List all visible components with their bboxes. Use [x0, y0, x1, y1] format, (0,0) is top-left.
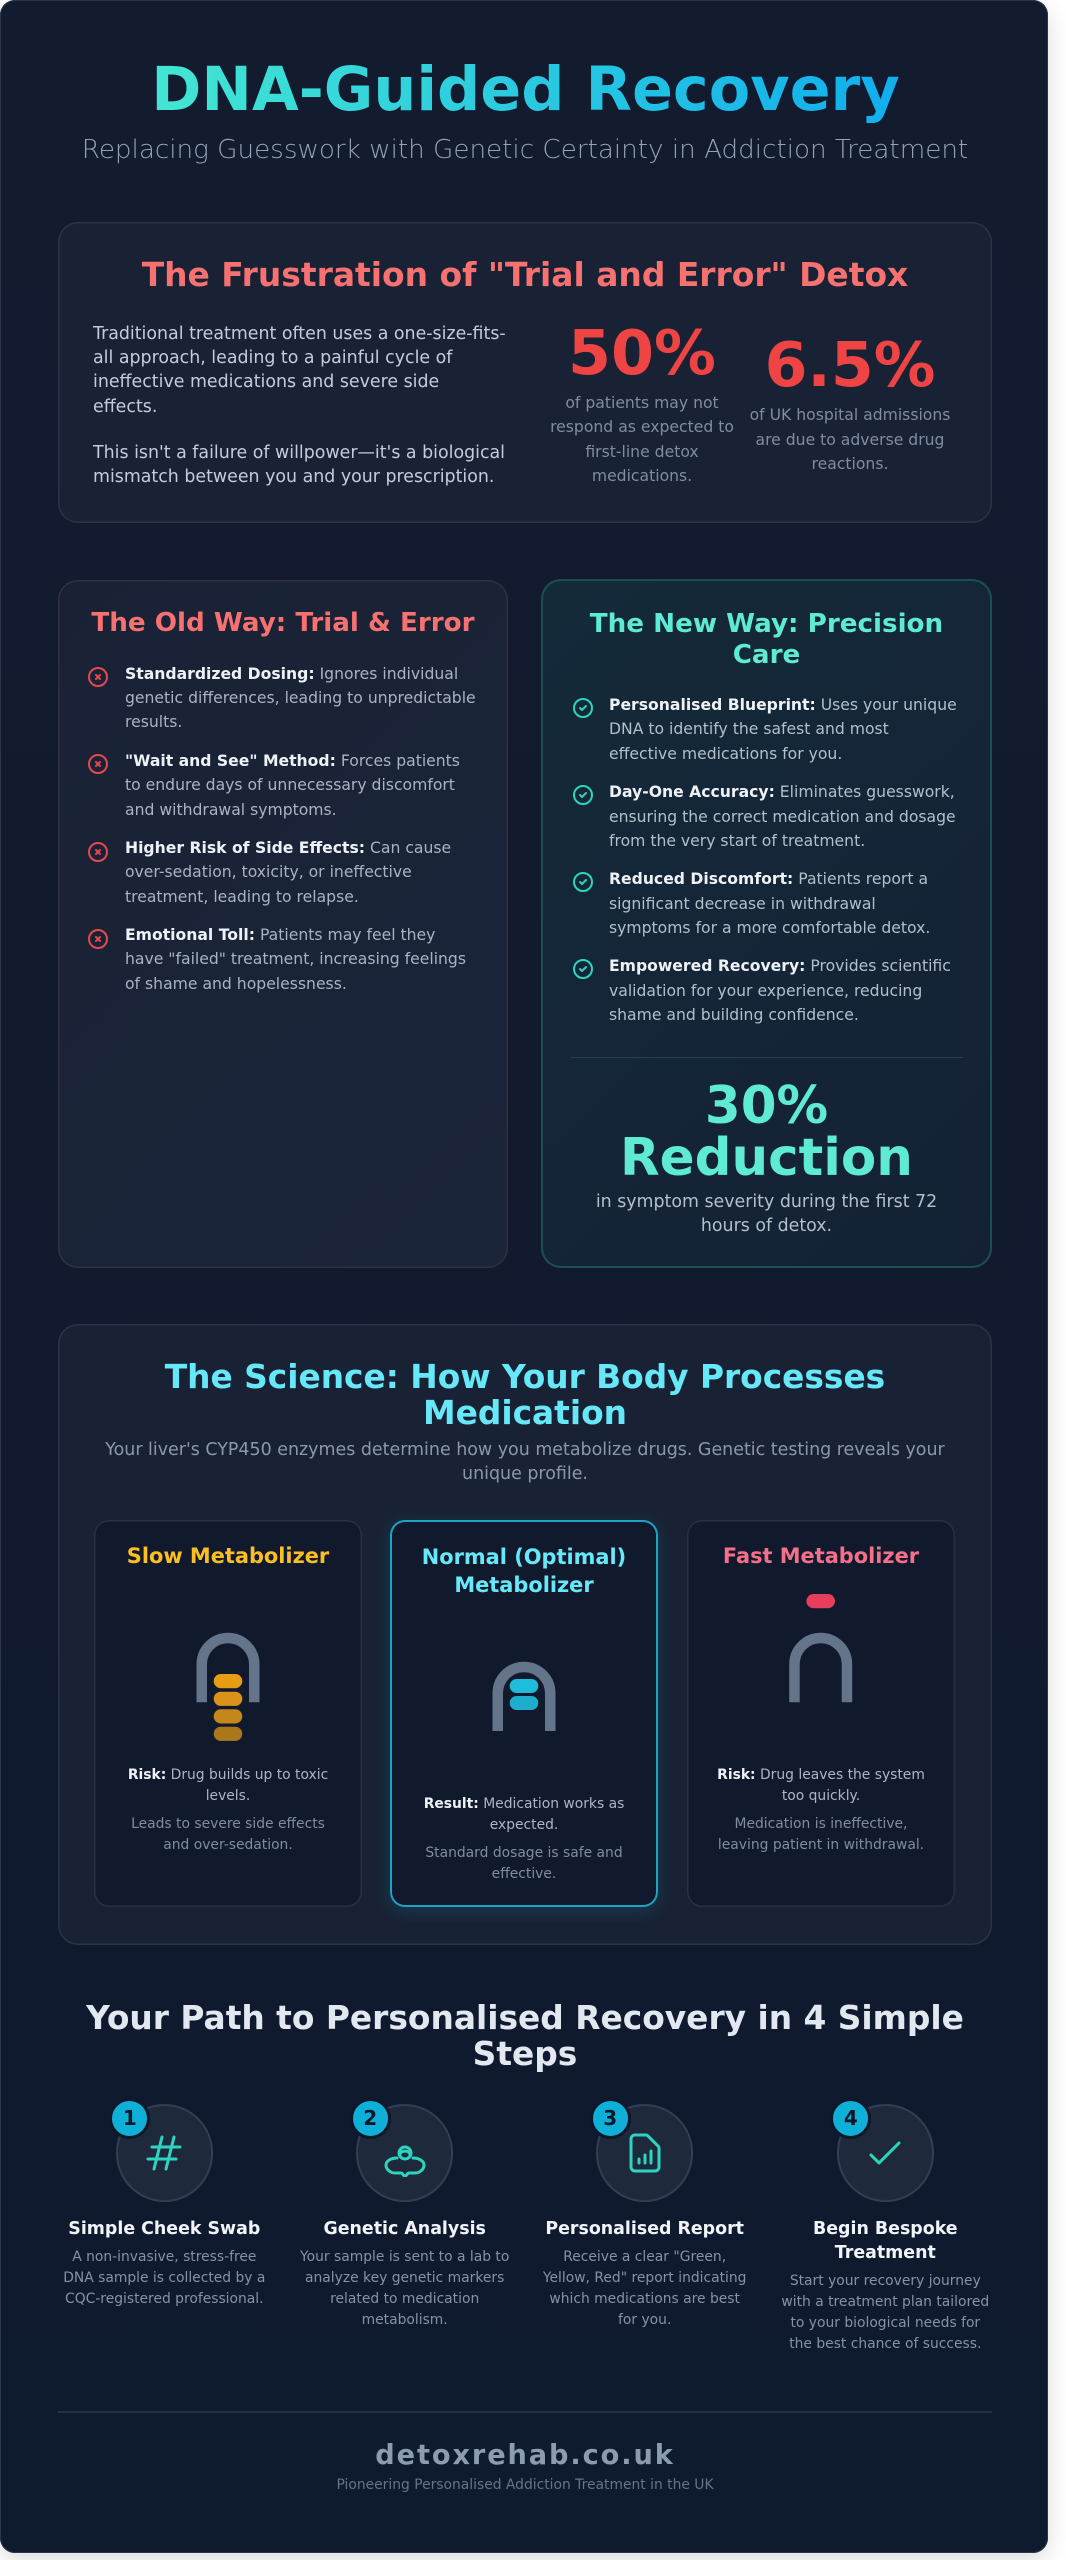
- list item: emotional toll: of shame and hopelessness.: [125, 974, 347, 993]
- icon: x circle 4: [88, 929, 108, 949]
- list item: empowered recovery: shame and building confidence.: [609, 1005, 859, 1024]
- heading: science: The Science: How Your Body Processes: [165, 1358, 885, 1396]
- step description: swab: CQC-registered professional.: [65, 2290, 264, 2306]
- card risk text: fast: [717, 1767, 925, 1804]
- list item: side effects: over-sedation, toxicity, or ineffective: [125, 862, 412, 881]
- badge: 3: 3: [603, 2106, 617, 2130]
- card risk text: slow: Risk: Drug builds up to toxic: [128, 1767, 328, 1783]
- badge: 3: [590, 2098, 631, 2138]
- stat: 50 percent: 50%: [568, 316, 716, 388]
- heading: path to recovery: [86, 1998, 964, 2072]
- list item: accuracy: [609, 782, 956, 850]
- text block: biological mismatch: This isn't a failure of willpower—it's a biological: [93, 442, 505, 462]
- icon: check circle 2: [573, 785, 593, 805]
- badge: 4: [830, 2098, 871, 2138]
- panel: the new way: [541, 579, 992, 1268]
- icon: fast metabolizer diagram: [789, 1594, 852, 1702]
- card note: fast: [718, 1816, 924, 1853]
- card note: slow: and over-sedation.: [163, 1837, 293, 1853]
- panel: the science: [58, 1324, 992, 1945]
- stat: 30 percent reduction: 30%: [705, 1076, 828, 1136]
- step description: report: Yellow, Red" report indicating: [543, 2270, 746, 2286]
- badge: 2: [350, 2098, 391, 2138]
- list item: wait and see: [125, 751, 460, 819]
- step description: treatment: Start your recovery journey: [790, 2273, 981, 2289]
- step 1: [63, 2101, 265, 2306]
- stat: 6.5 percent: 6.5%: [765, 328, 935, 400]
- step title: treatment: Treatment: [835, 2243, 936, 2263]
- list item: side effects: [125, 838, 451, 906]
- heading: new way: Care: [733, 640, 800, 670]
- heading: new way: The New Way: Precision: [590, 609, 943, 639]
- step description: analysis: related to medication: [330, 2290, 479, 2306]
- card title: slow: Slow Metabolizer: [127, 1544, 329, 1568]
- step description: swab: DNA sample is collected by a: [63, 2270, 265, 2286]
- text block: intro: all approach, leading to a painful cycle of: [93, 348, 452, 368]
- step description: report: which medications are best: [549, 2290, 740, 2306]
- footer brand: detoxrehab.co.uk: [375, 2440, 675, 2471]
- card result text: normal: [424, 1796, 624, 1833]
- icon: normal metabolizer diagram: [492, 1662, 556, 1731]
- list item: side effects: Higher Risk of Side Effects: Can cause: [125, 838, 451, 857]
- step description: swab: A non-invasive, stress-free: [72, 2248, 256, 2264]
- card note: normal: [425, 1845, 623, 1882]
- heading: old way: The Old Way: Trial & Error: [91, 608, 475, 638]
- list item: accuracy: Day-One Accuracy: Eliminates guesswork,: [609, 782, 955, 801]
- text block: biological mismatch: [92, 442, 505, 487]
- step title: treatment: Begin Bespoke: [813, 2218, 958, 2238]
- icon: x circle 1: [88, 667, 108, 687]
- text block: science intro: Your liver's CYP450 enzymes determine how you metabolize drugs. Genetic testing reveals your: [105, 1440, 945, 1460]
- text block: biological mismatch: mismatch between you and your prescription.: [93, 467, 494, 487]
- card risk text: fast: too quickly.: [782, 1788, 860, 1804]
- card: fast metabolizer: [687, 1520, 955, 1907]
- step 4: [765, 2100, 1005, 2360]
- step description: report: Receive a clear "Green,: [563, 2248, 726, 2264]
- text block: science intro: unique profile.: [462, 1464, 588, 1484]
- step description: treatment: with a treatment plan tailored: [781, 2294, 989, 2310]
- stat label: 50 percent: of patients may not: [565, 392, 719, 412]
- list item: empowered recovery: validation for your experience, reducing: [609, 981, 922, 1000]
- card note: slow: [131, 1816, 325, 1853]
- heading: path to recovery: Steps: [473, 2034, 577, 2072]
- stat label: symptom severity: [596, 1192, 937, 1236]
- card risk text: slow: [128, 1767, 328, 1804]
- text block: intro: ineffective medications and severe side: [93, 372, 439, 392]
- text block: intro: Traditional treatment often uses a one-size-fits-: [93, 324, 506, 344]
- card title: fast: Fast Metabolizer: [723, 1544, 919, 1568]
- list item: blueprint: Personalised Blueprint: Uses your unique: [609, 695, 957, 714]
- icon: report document: [621, 2129, 669, 2177]
- list item: emotional toll: have "failed" treatment, increasing feelings: [125, 949, 466, 968]
- list item: reduced discomfort: significant decrease in withdrawal: [609, 894, 876, 913]
- list item: blueprint: effective medications for you.: [609, 744, 842, 763]
- title: DNA-Guided Recovery: [151, 54, 900, 124]
- step title: report: Personalised Report: [545, 2218, 744, 2238]
- panel: the old way: [58, 580, 508, 1268]
- heading: frustration: The Frustration of "Trial and Error" Detox: [142, 254, 908, 294]
- list item: emotional toll: Emotional Toll: Patients may feel they: [125, 925, 435, 944]
- icon: check circle 1: [573, 698, 593, 718]
- card title: normal: Normal (Optimal): [422, 1544, 626, 1568]
- stat label: 6.5 percent: are due to adverse drug: [756, 430, 944, 448]
- stat label: 6.5 percent: [750, 405, 950, 473]
- step description: report: for you.: [618, 2312, 671, 2328]
- step description: analysis: analyze key genetic markers: [305, 2270, 504, 2286]
- stat: 30 percent reduction: Reduction: [620, 1128, 913, 1188]
- card note: normal: effective.: [492, 1866, 556, 1882]
- step description: analysis: [285, 2246, 525, 2330]
- step description: analysis: metabolism.: [362, 2312, 448, 2328]
- list item: reduced discomfort: [609, 869, 930, 937]
- heading: science: Medication: [423, 1394, 627, 1432]
- step description: treatment: to your biological needs for: [790, 2315, 980, 2331]
- heading: path to recovery: Your Path to Personalised Recovery in 4 Simple: [86, 1998, 964, 2036]
- badge: 1: 1: [123, 2106, 137, 2130]
- step 2: [300, 2101, 509, 2328]
- text block: intro: effects.: [93, 397, 157, 417]
- stat label: 50 percent: medications.: [592, 466, 692, 485]
- step 3: [525, 2100, 765, 2360]
- icon: check mark: [861, 2129, 909, 2177]
- stat label: 50 percent: [550, 392, 734, 485]
- list item: wait and see: and withdrawal symptoms.: [125, 800, 337, 819]
- list item: side effects: treatment, leading to relapse.: [125, 887, 359, 906]
- stat label: 50 percent: respond as expected to: [550, 417, 734, 436]
- icon: check circle 3: [573, 872, 593, 892]
- step description: treatment: [765, 2271, 1005, 2355]
- icon: hashtag: [146, 2136, 182, 2170]
- badge: 4: 4: [844, 2106, 858, 2130]
- stat label: symptom severity: in symptom severity during the first 72: [596, 1192, 937, 1212]
- list item: empowered recovery: [609, 956, 951, 1024]
- list item: accuracy: ensuring the correct medication and dosage: [609, 807, 956, 826]
- list item: empowered recovery: Empowered Recovery: Provides scientific: [609, 956, 951, 975]
- stat label: 50 percent: first-line detox: [585, 442, 699, 460]
- card risk text: slow: levels.: [206, 1788, 250, 1804]
- heading: science: [164, 1358, 885, 1432]
- list item: standardized dosing: [125, 664, 476, 731]
- card title: normal: [422, 1544, 626, 1596]
- step description: treatment: the best chance of success.: [789, 2336, 981, 2352]
- list item: blueprint: DNA to identify the safest and most: [609, 719, 889, 738]
- card result text: normal: Result: Medication works as: [424, 1796, 624, 1812]
- card risk text: fast: Risk: Drug leaves the system: [717, 1767, 925, 1783]
- list item: reduced discomfort: symptoms for a more comfortable detox.: [609, 918, 930, 937]
- card: slow metabolizer: [94, 1520, 362, 1907]
- icon: x circle 2: [88, 754, 108, 774]
- step description: swab: [63, 2248, 265, 2306]
- icon: check circle 4: [573, 959, 593, 979]
- list item: standardized dosing: results.: [125, 712, 182, 731]
- footer tagline: Pioneering Personalised Addiction Treatment in the UK: [336, 2477, 714, 2493]
- step description: analysis: Your sample is sent to a lab to: [300, 2248, 509, 2264]
- icon: x circle 3: [88, 842, 108, 862]
- step description: report: [525, 2246, 765, 2330]
- list item: accuracy: from the very start of treatment.: [609, 831, 865, 850]
- badge: 1: [109, 2098, 150, 2138]
- stat: 30 percent reduction: [620, 1076, 913, 1188]
- card title: normal: Metabolizer: [454, 1572, 594, 1596]
- list item: wait and see: to endure days of unnecessary discomfort: [125, 775, 455, 794]
- step title: analysis: Genetic Analysis: [323, 2218, 486, 2238]
- stat label: symptom severity: hours of detox.: [701, 1216, 832, 1236]
- card result text: normal: expected.: [490, 1817, 558, 1833]
- text block: intro: [92, 324, 506, 417]
- list item: reduced discomfort: Reduced Discomfort: Patients report a: [609, 869, 928, 888]
- card note: normal: Standard dosage is safe and: [425, 1845, 623, 1861]
- list item: wait and see: "Wait and See" Method: Forces patients: [125, 751, 460, 770]
- subtitle: Replacing Guesswork with Genetic Certainty in Addiction Treatment: [82, 135, 968, 165]
- stat label: 6.5 percent: reactions.: [812, 454, 888, 473]
- icon: slow metabolizer diagram: [196, 1632, 260, 1741]
- text block: science intro: [105, 1440, 945, 1484]
- step title: swab: Simple Cheek Swab: [68, 2218, 260, 2238]
- card note: fast: leaving patient in withdrawal.: [718, 1837, 924, 1853]
- list item: emotional toll: [125, 925, 466, 993]
- icon: genetic analysis: [381, 2129, 429, 2177]
- list item: standardized dosing: genetic differences, leading to unpredictable: [125, 688, 476, 707]
- heading: new way: [590, 609, 943, 670]
- list item: standardized dosing: Standardized Dosing: Ignores individual: [125, 664, 458, 682]
- stat label: 6.5 percent: of UK hospital admissions: [750, 405, 950, 424]
- badge: 2: 2: [363, 2106, 377, 2130]
- card note: fast: Medication is ineffective,: [735, 1816, 907, 1832]
- step title: treatment: [765, 2216, 1005, 2265]
- list item: blueprint: [609, 695, 957, 763]
- card: normal metabolizer: [390, 1520, 658, 1907]
- panel: frustration of trial and error: [58, 222, 992, 523]
- card note: slow: Leads to severe side effects: [131, 1816, 325, 1832]
